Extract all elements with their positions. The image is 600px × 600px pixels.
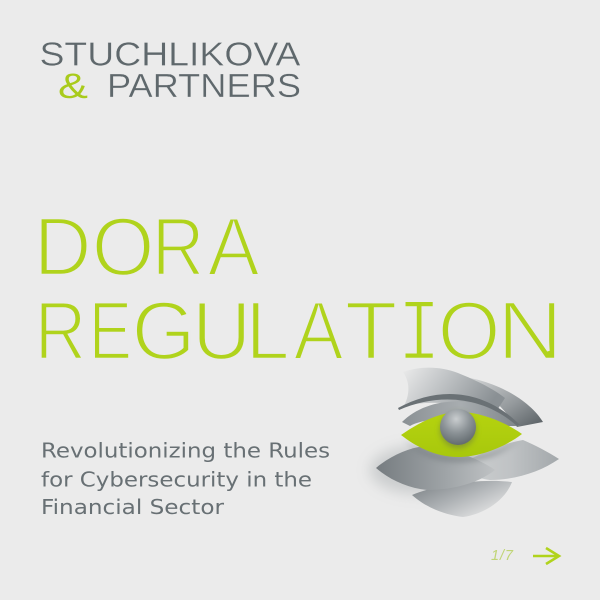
logo <box>40 37 301 106</box>
title line: REGULATION: R <box>35 285 86 377</box>
icon: eye shadow <box>404 438 520 462</box>
title line: REGULATION: G <box>132 285 196 377</box>
title line: DORA: A <box>208 201 260 294</box>
title line: REGULATION: A <box>294 284 344 377</box>
subtitle line 1: Revolutionizing the Rules <box>41 439 330 463</box>
icon: mid band under arc <box>402 401 520 426</box>
icon: green eye <box>401 412 522 457</box>
eye illustration <box>370 368 559 517</box>
page number: 1/7 <box>491 548 514 564</box>
icon: upper leaf <box>403 368 505 415</box>
title line: DORA: D <box>34 201 91 293</box>
title line: REGULATION: U <box>192 285 251 377</box>
logo line: STUCHLIKOVA: STUCHLIKOVA <box>40 37 301 74</box>
icon: left lower leaf <box>376 446 495 490</box>
subtitle <box>41 439 330 519</box>
icon: sphere <box>440 409 476 445</box>
icon: right lower leaf <box>460 440 559 480</box>
arrow <box>533 548 559 564</box>
subtitle line 2: for Cybersecurity in the <box>41 467 312 491</box>
title line: DORA: R <box>152 200 205 293</box>
title line: REGULATION: E <box>89 284 132 377</box>
title line: REGULATION: O <box>438 285 500 377</box>
icon: leaves shadow <box>370 446 470 494</box>
title line: DORA <box>34 200 260 294</box>
logo ampersand: & <box>58 67 88 106</box>
title line: REGULATION: I <box>397 287 441 386</box>
icon: upper arc <box>398 394 520 426</box>
title line: REGULATION <box>35 284 563 386</box>
title line: REGULATION: T <box>345 284 397 377</box>
subtitle line 3: Financial Sector <box>41 495 225 519</box>
icon: iris shadow <box>440 412 476 448</box>
icon: upper right leaf <box>470 378 543 427</box>
title line: REGULATION: L <box>246 285 289 377</box>
icon: bottom leaf <box>412 481 512 517</box>
title line: REGULATION: N <box>497 285 563 377</box>
title line: DORA: O <box>92 201 154 293</box>
logo line: PARTNERS: PARTNERS <box>107 68 301 105</box>
title <box>34 200 563 386</box>
